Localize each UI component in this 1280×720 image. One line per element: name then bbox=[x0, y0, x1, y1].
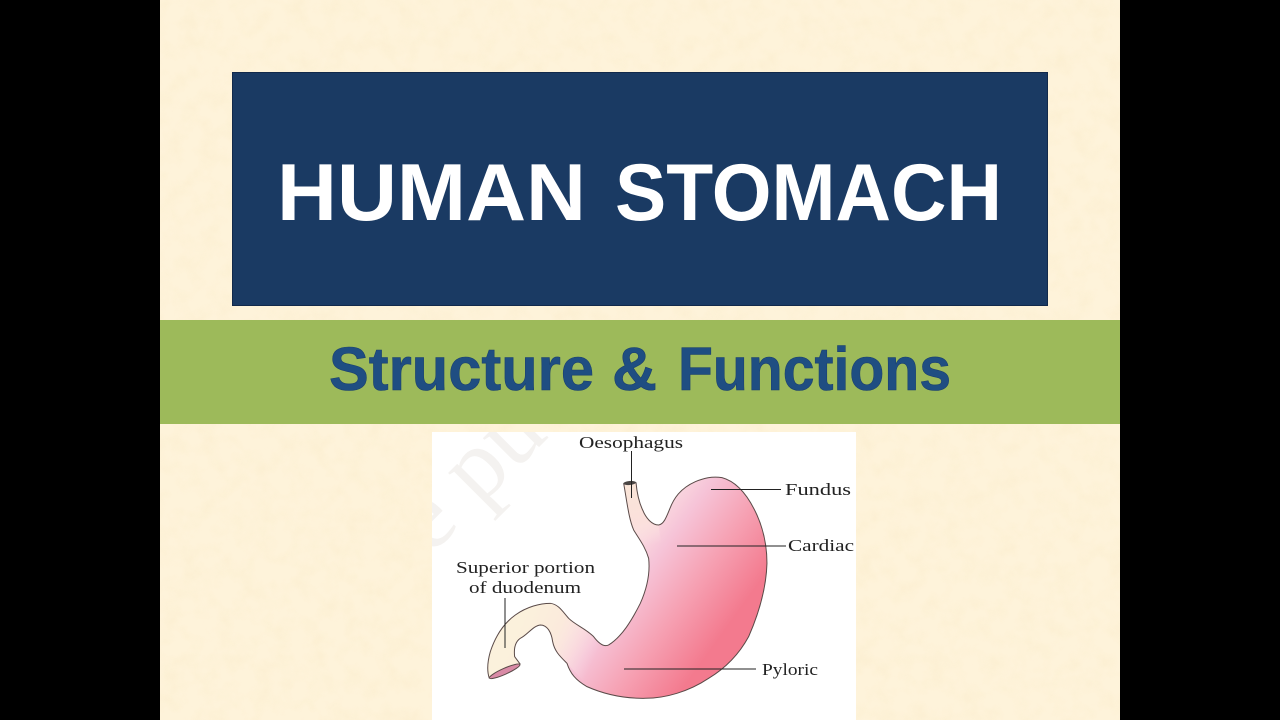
subtitle band bbox=[160, 320, 1120, 424]
label: cardiac: Cardiac bbox=[788, 536, 855, 555]
subtitle word: structure: Structure bbox=[329, 335, 594, 403]
label: duodenum second line: of duodenum bbox=[469, 578, 581, 597]
oesophagus opening bbox=[623, 480, 636, 486]
labels bbox=[456, 433, 855, 679]
stomach illustration bbox=[488, 477, 767, 698]
stomach outline bbox=[488, 477, 767, 698]
title word: stomach: STOMACH bbox=[615, 148, 1002, 238]
diagram: stomach anatomy bbox=[432, 432, 856, 720]
duodenum tint bbox=[488, 603, 612, 687]
label: duodenum: Superior portion bbox=[456, 558, 596, 577]
label: pyloric: Pyloric bbox=[762, 660, 819, 679]
oesophagus tint bbox=[624, 483, 662, 558]
subtitle word: functions: Functions bbox=[678, 335, 951, 403]
title word: human: HUMAN bbox=[277, 148, 586, 238]
label: oesophagus: Oesophagus bbox=[579, 433, 683, 452]
title banner bbox=[232, 72, 1048, 306]
leader lines bbox=[505, 451, 786, 669]
watermark: e pub bbox=[367, 338, 601, 572]
subtitle ampersand: & bbox=[612, 335, 657, 403]
label: fundus: Fundus bbox=[785, 480, 851, 499]
duodenum opening bbox=[488, 662, 521, 681]
